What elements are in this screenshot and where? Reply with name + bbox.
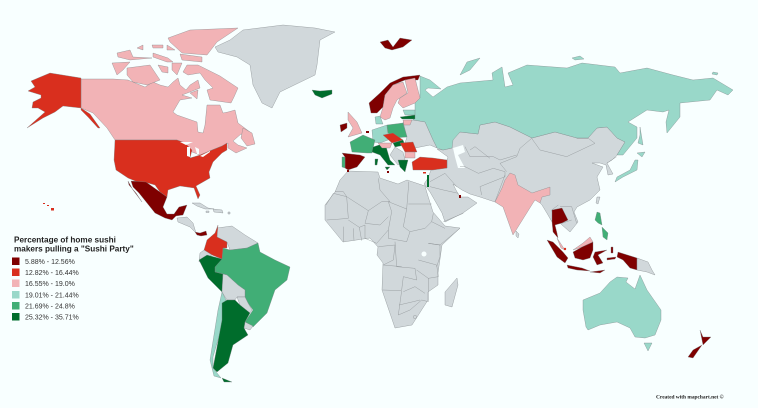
country: Alaska bbox=[27, 73, 100, 128]
country: Ecuador bbox=[199, 250, 212, 262]
island: Taiwan bbox=[596, 197, 600, 204]
region: Europe bbox=[340, 38, 461, 198]
country: Russia bbox=[413, 56, 733, 155]
country: Paraguay bbox=[237, 297, 252, 313]
country: India bbox=[495, 173, 550, 235]
country: Czechia and Slovakia bbox=[383, 133, 403, 143]
island: Sri Lanka bbox=[516, 231, 519, 238]
African country borders bbox=[326, 178, 460, 319]
lake: Victoria bbox=[422, 252, 426, 256]
country: Malaysia bbox=[557, 237, 593, 250]
country: Bolivia bbox=[222, 274, 245, 300]
country: Austria bbox=[378, 143, 392, 148]
legend item 2: 12.82% - 16.44% bbox=[25, 270, 79, 277]
country: Sweden bbox=[380, 82, 407, 120]
country: Iceland bbox=[312, 90, 332, 98]
country: Denmark bbox=[375, 116, 383, 124]
water: Great Lakes bbox=[180, 142, 210, 157]
island: Tasmania bbox=[644, 343, 652, 351]
country: Belgium bbox=[366, 131, 369, 133]
country: Hawaii bbox=[43, 203, 54, 210]
legend item 5: 21.69% - 24.8% bbox=[25, 304, 75, 310]
country: Mexico bbox=[128, 181, 187, 220]
Asia grey countries bbox=[424, 122, 625, 232]
credit: Created with mapchart.net © bbox=[656, 394, 724, 400]
legend item 4: 19.01% - 21.44% bbox=[25, 292, 79, 300]
legend title: Percentage of home sushi bbox=[14, 236, 116, 244]
region: Africa bbox=[325, 171, 460, 328]
country: Greenland bbox=[215, 25, 335, 108]
country: Latvia bbox=[400, 115, 415, 119]
country: Peru bbox=[199, 255, 223, 292]
region: North America bbox=[27, 28, 255, 236]
country: Italy bbox=[372, 143, 395, 170]
country: Colombia bbox=[204, 225, 227, 259]
country: Canada bbox=[81, 28, 255, 155]
country: Lithuania bbox=[403, 120, 412, 125]
country: Singapore bbox=[564, 248, 566, 250]
small marks: Cyprus, Malta, Qatar bbox=[347, 170, 461, 198]
country: Madagascar bbox=[445, 278, 458, 307]
country: Turkey bbox=[412, 157, 447, 170]
continent: Africa bbox=[325, 171, 460, 328]
country: United States bbox=[114, 140, 227, 199]
country: Poland bbox=[387, 123, 407, 138]
country: Argentina bbox=[213, 300, 250, 382]
Eastern Europe and Balkans bbox=[390, 120, 437, 165]
country: Bulgaria bbox=[405, 152, 415, 158]
country: Thailand bbox=[552, 208, 568, 238]
region: Oceania bbox=[583, 275, 711, 358]
country: Spain bbox=[342, 153, 365, 170]
country: Papua New Guinea bbox=[637, 258, 655, 275]
legend item 6: 25.32% - 35.71% bbox=[25, 314, 79, 322]
country: Israel bbox=[427, 175, 429, 187]
country: Estonia bbox=[403, 110, 415, 115]
legend bbox=[12, 236, 134, 322]
country: Chile bbox=[210, 292, 226, 378]
country: United Kingdom bbox=[348, 112, 362, 137]
country: Hungary bbox=[393, 140, 405, 147]
country: Greece bbox=[398, 160, 408, 172]
legend item 1: 5.88% - 12.56% bbox=[25, 259, 75, 266]
country: Ireland bbox=[340, 123, 347, 132]
Venezuela and Guianas bbox=[217, 226, 258, 250]
country: Panama bbox=[195, 231, 207, 236]
water: Caspian Sea bbox=[453, 145, 465, 168]
country: Svalbard bbox=[380, 38, 412, 50]
region: Asia bbox=[413, 56, 733, 275]
Asian country borders bbox=[460, 138, 617, 223]
Central America and Caribbean bbox=[177, 203, 230, 233]
country: Japan bbox=[615, 152, 645, 182]
country: New Zealand bbox=[688, 330, 711, 358]
country: France bbox=[350, 135, 375, 153]
country: Brazil bbox=[215, 243, 290, 327]
country: Germany bbox=[372, 125, 388, 143]
country: Norway bbox=[369, 75, 420, 113]
legend item 3: 16.55% - 19.0% bbox=[25, 281, 75, 288]
country: Australia bbox=[583, 275, 661, 338]
region: South America bbox=[199, 225, 290, 382]
country: Romania bbox=[400, 142, 417, 152]
country: Portugal bbox=[342, 157, 345, 168]
country: Finland bbox=[398, 78, 420, 108]
country: Philippines bbox=[595, 212, 608, 240]
country: Uruguay bbox=[244, 322, 253, 330]
legend title: makers pulling a "Sushi Party" bbox=[14, 244, 134, 254]
country: Indonesia bbox=[547, 240, 637, 273]
